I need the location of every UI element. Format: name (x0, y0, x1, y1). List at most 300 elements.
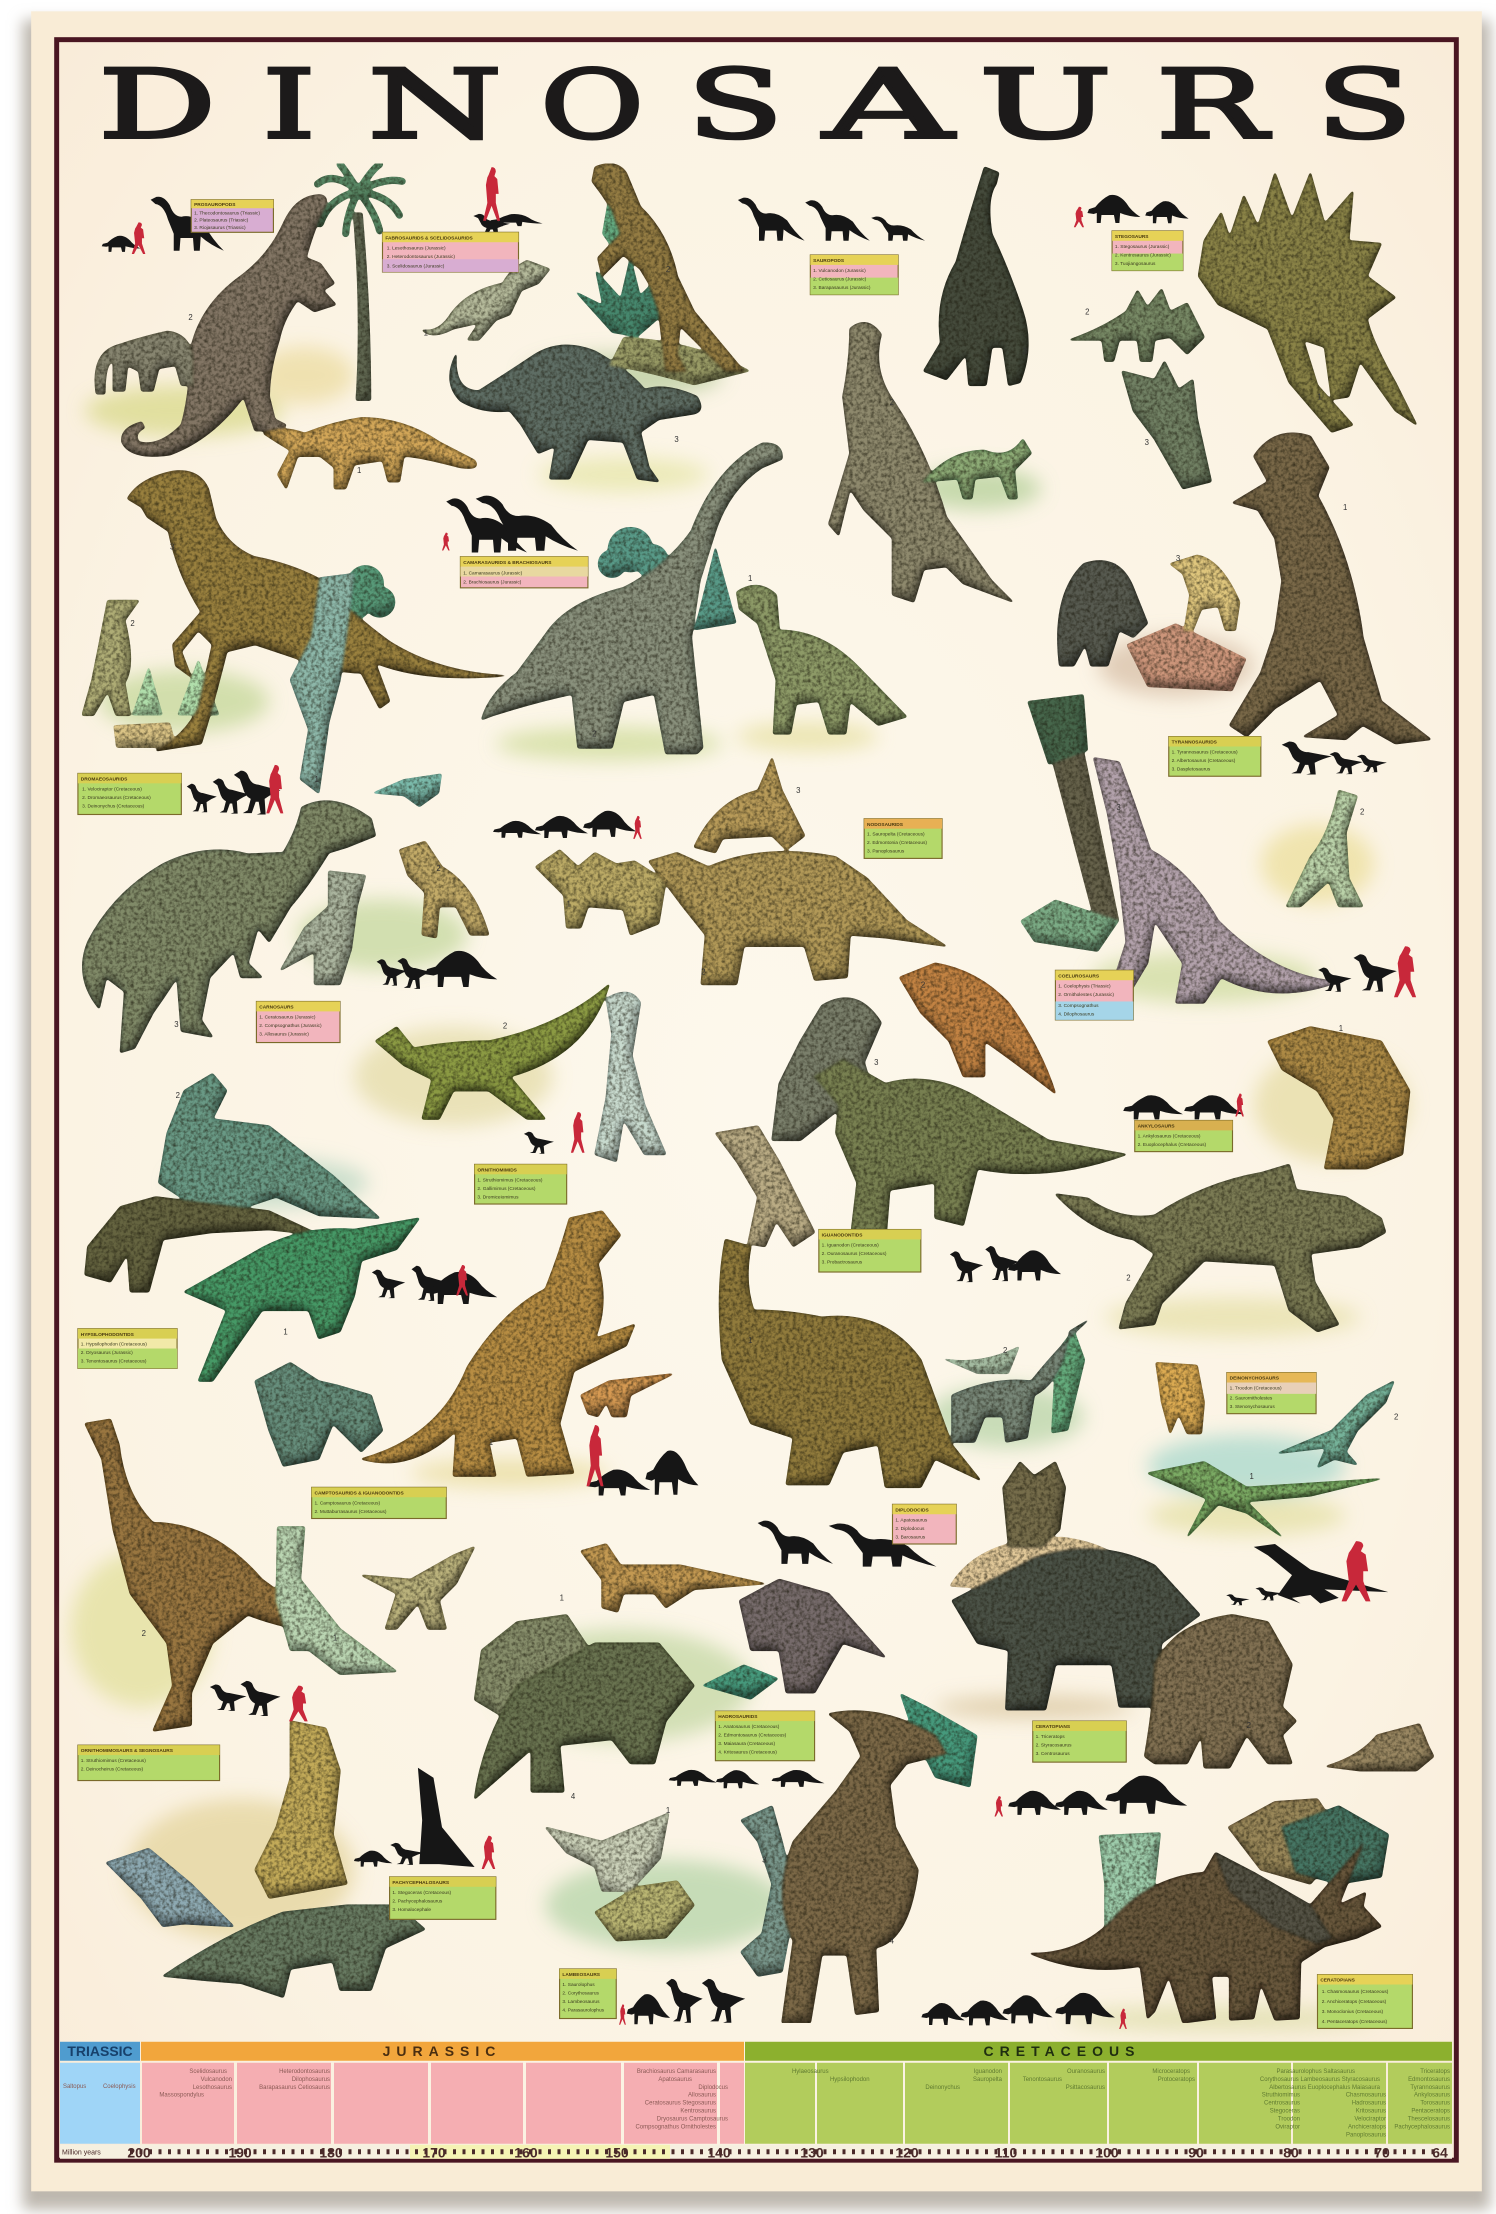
chart: Triassic cell: Coelophysis (103, 2084, 136, 2090)
figure numbers: 2 (436, 864, 441, 873)
caption: camarasaurs and brachiosaurs: 2. Brachiosaurus (Jurassic) (463, 580, 522, 586)
dinosaur paintings (82, 164, 1434, 2023)
dinosaur: parasaurolophus (782, 1711, 946, 2023)
dinosaur: tan theropod (715, 1126, 815, 1247)
caption: diplodocids: DIPLODOCIDS (895, 1507, 929, 1513)
chart: Jurassic genus names: Lesothosaurus (193, 2085, 232, 2091)
caption: ornithomimids (475, 1164, 567, 1204)
period header: Cretaceous (745, 2042, 1452, 2061)
caption: ornithomimosaurs (78, 1745, 220, 1781)
chart: Cretaceous genus names (792, 2069, 1450, 2139)
chart: Cretaceous genus names: Ouranosaurus (1067, 2069, 1105, 2075)
chart: Cretaceous genus names: Ankylosaurus (1414, 2093, 1450, 2099)
dinosaur: grey prosauropod (95, 331, 193, 394)
silhouettes: large ornithopods with human (586, 1425, 698, 1496)
dinosaur: pale green theropod (1286, 790, 1363, 907)
figure numbers (130, 265, 1398, 2021)
dinosaur: dark sauropod (924, 167, 1028, 385)
dinosaur: teal running theropod (1278, 1381, 1394, 1468)
caption: nodosaurs: 3. Panoplosaurus (867, 849, 905, 855)
figure numbers: 1 (748, 574, 752, 583)
caption: iguanodontids: 3. Probactrosaurus (822, 1260, 863, 1266)
figure numbers: 1 (560, 1594, 564, 1603)
caption: dromaeosaurs: 1. Velociraptor (Cretaceous) (82, 786, 142, 792)
figure numbers: 1 (489, 1438, 493, 1447)
dinosaur: grey-green pachy (475, 1615, 595, 1721)
caption: sauropods: 2. Cetiosaurus (Jurassic) (813, 276, 867, 282)
chart: Triassic cell: Saltopus (63, 2084, 86, 2090)
caption: tyrannosaurs: 3. Daspletosaurus (1172, 767, 1211, 773)
chart: Cretaceous genus names: Chasmosaurus (1346, 2093, 1386, 2099)
figure numbers: 1 (283, 1327, 288, 1336)
chart: million-years scale: 110 (995, 2145, 1017, 2161)
caption: ceratopsians lower: 2. Anchiceratops (Cretaceous) (1322, 1999, 1387, 2005)
dinosaur: green background ceratopsian (1099, 1833, 1160, 1929)
silhouettes: tyrannosaurs (1282, 742, 1387, 774)
chart: million-years scale: 130 (800, 2145, 824, 2161)
dinosaur: blue-green ornithopod (159, 1074, 380, 1218)
chart: Cretaceous genus names: Pentaceratops (1411, 2109, 1450, 2115)
caption: camptosaurs and iguanodonts: 2. Muttaburrasaurus (Cretaceous) (314, 1509, 387, 1515)
caption: carnosaurs: 2. Compsognathus (Jurassic) (259, 1023, 322, 1029)
caption: nodosaurs: 2. Edmontonia (Cretaceous) (867, 840, 927, 846)
dinosaur: golden prosauropod (264, 418, 476, 489)
silhouettes: early ornithischians (473, 167, 543, 236)
figure numbers: 2 (921, 980, 925, 989)
chart: Jurassic genus names: Barapasaurus Cetiosaurus (259, 2085, 330, 2091)
chart: Cretaceous cells (745, 2063, 1452, 2144)
dinosaur: distant sauropod (938, 1346, 1020, 1374)
figure numbers: 4 (571, 1792, 576, 1801)
caption: stegosaurs: 2. Kentrosaurus (Jurassic) (1115, 252, 1171, 258)
chart: Cretaceous genus names: Psittacosaurus (1066, 2085, 1105, 2091)
palm tree (317, 164, 402, 401)
dinosaur: big prosauropod (122, 195, 336, 456)
caption: camptosaurs and iguanodonts: 1. Camptosaurus (Cretaceous) (314, 1500, 380, 1506)
figure numbers: 2 (1247, 1721, 1251, 1730)
title: I (262, 50, 316, 160)
silhouettes: nodosaurs (493, 811, 642, 839)
chart: million-years scale: 190 (228, 2145, 252, 2161)
caption: hadrosaurs: 1. Anatosaurus (Cretaceous) (718, 1724, 780, 1730)
caption: hadrosaurs: 4. Kritosaurus (Cretaceous) (718, 1750, 777, 1756)
chart: Jurassic genus names: Apatosaurus (658, 2077, 692, 2083)
caption: ceratopsians upper (1033, 1721, 1126, 1762)
caption: stegosaurs: 3. Tuojiangosaurus (1115, 261, 1156, 267)
dinosaur: great triceratops (1030, 1844, 1381, 2023)
figure numbers: 3 (1116, 803, 1121, 812)
chart: Jurassic genus names: Dryosaurus Camptosaurus (657, 2117, 728, 2123)
figure numbers: 2 (142, 1629, 146, 1638)
dinosaur: blue ornithopod (106, 1849, 234, 1926)
chart: Triassic cell (60, 2063, 140, 2144)
caption: carnosaurs (256, 1001, 340, 1043)
chart: Cretaceous genus names: Microceratops (1152, 2069, 1190, 2075)
title: N (368, 50, 502, 160)
caption: coelurosaurs: 1. Coelophysis (Triassic) (1058, 983, 1111, 989)
caption: iguanodontids: 2. Ouranosaurus (Cretaceous) (822, 1251, 887, 1257)
black silhouettes with human scale (102, 167, 1416, 2029)
dinosaur: brown standing theropod (592, 164, 744, 371)
dinosaur: top ankylosaur (694, 758, 805, 853)
figure numbers: 2 (1112, 562, 1116, 571)
caption: ornithischians and scelidosaurs: FABROSAURIDS & SCELIDOSAURIDS (385, 235, 474, 241)
figure numbers: 3 (874, 1058, 878, 1067)
chart: Jurassic genus names: Ceratosaurus Stegosaurus (645, 2101, 716, 2107)
dinosaur: main armoured ankylosaur (649, 852, 946, 984)
caption: deinonychosaurs (1227, 1373, 1316, 1414)
dinosaur: tan theropod (400, 841, 489, 938)
caption: ceratopsians lower: CERATOPIANS (1320, 1978, 1356, 1984)
dinosaur: giant brachiosaur (482, 443, 782, 754)
silhouettes: ornithomimids (1318, 946, 1416, 997)
chart: Cretaceous genus names: Stegoceras (1270, 2109, 1300, 2115)
chart: million-years scale: 150 (605, 2145, 629, 2161)
tree: leaning trunk (1020, 694, 1119, 952)
caption: lambeosaurs: 2. Corythosaurus (562, 1990, 600, 1996)
caption: ornithischians and scelidosaurs: 2. Heterodontosaurus (Jurassic) (387, 254, 455, 260)
chart: Cretaceous genus names: Deinonychus (925, 2085, 960, 2091)
caption: stegosaurs: 1. Stegosaurus (Jurassic) (1115, 244, 1170, 250)
caption: lambeosaurs (560, 1969, 616, 2019)
silhouettes: stegosaurs (1074, 195, 1189, 227)
caption: nodosaurs (864, 819, 942, 858)
dinosaur: standing iguanodont (1230, 433, 1431, 744)
caption: stegosaurs (1112, 231, 1183, 271)
caption: ornithischians and scelidosaurs: 1. Lesothosaurus (Jurassic) (387, 245, 446, 251)
chart: Cretaceous genus names: Oviraptor (1275, 2125, 1300, 2131)
silhouettes: prosauropods (102, 197, 224, 254)
caption: pachycephalosaurs: 1. Stegoceras (Cretaceous) (392, 1890, 451, 1896)
period header: Triassic: TRIASSIC (67, 2043, 133, 2059)
silhouettes: ornithopods row (377, 951, 497, 989)
figure numbers: 3 (796, 786, 800, 795)
plant: cycad trees (598, 527, 737, 630)
chart: Cretaceous genus names: Anchiceratops (1348, 2125, 1386, 2131)
caption: deinonychosaurs: DEINONYCHOSAURS (1230, 1376, 1280, 1382)
dinosaur: styracosaur on mound (949, 1462, 1140, 1594)
caption: dromaeosaurs (78, 773, 181, 814)
caption: hypsilophodontids (78, 1329, 177, 1368)
figure numbers: 2 (890, 398, 894, 407)
caption: pachycephalosaurs: 2. Pachycephalosaurus (392, 1898, 443, 1904)
caption: pachycephalosaurs: PACHYCEPHALOSAURS (392, 1880, 450, 1886)
caption: lambeosaurs: LAMBEOSAURS (562, 1972, 601, 1978)
dinosaur: ostrich mimic (85, 1419, 340, 1731)
chart: Jurassic genus names: Diplodocus (698, 2085, 728, 2091)
caption: lambeosaurs: 1. Saurolophus (562, 1982, 595, 1988)
caption: hypsilophodontids: 3. Tenontosaurus (Cretaceous) (81, 1359, 147, 1365)
chart: Cretaceous genus names: Corythosaurus Lambeosaurus Styracosaurus (1260, 2077, 1380, 2083)
caption: tyrannosaurs: 2. Albertosaurus (Cretaceous) (1172, 758, 1236, 764)
silhouettes: ceratopsian row (921, 1993, 1127, 2029)
caption: hypsilophodontids: HYPSILOPHODONTIDS (81, 1332, 135, 1338)
caption: diplodocids: 2. Diplodocus (895, 1526, 925, 1532)
title: O (540, 50, 644, 160)
chart: Jurassic genus names: Kentrosaurus (680, 2109, 716, 2115)
chart: Cretaceous genus names: Edmontosaurus (1408, 2077, 1450, 2083)
dinosaur: spiky nodosaur (536, 850, 666, 935)
caption: ceratopsians lower: 4. Pentaceratops (Cretaceous) (1322, 2019, 1387, 2025)
title: U (979, 49, 1112, 160)
caption: ankylosaurs: 2. Euoplocephalus (Cretaceous) (1138, 1142, 1207, 1148)
dinosaur: small upright theropod (82, 601, 139, 715)
chart: Jurassic genus names: Allosaurus (688, 2093, 716, 2099)
chart: Cretaceous genus names: Thescelosaurus (1408, 2117, 1450, 2123)
caption: iguanodontids: IGUANODONTIDS (822, 1233, 863, 1239)
dinosaur: green-grey theropod (83, 801, 375, 1052)
chart: Cretaceous genus names: Triceratops (1420, 2069, 1450, 2075)
caption: ornithomimosaurs: 1. Struthiomimus (Cretaceous) (81, 1758, 146, 1764)
dinosaur: main tan ornithopod (361, 1211, 635, 1476)
caption: coelurosaurs: 4. Dilophosaurus (1058, 1012, 1095, 1018)
caption: prosauropods: 3. Riojasaurus (Triassic) (194, 225, 246, 231)
chart: Cretaceous genus names: Hypsilophodon (830, 2077, 870, 2083)
dinosaur: green stegosaur (1122, 361, 1211, 489)
chart: million-years scale (60, 2145, 1452, 2161)
dinosaur: slender teal lambeosaur (741, 1806, 796, 1976)
caption: coelurosaurs: COELUROSAURS (1058, 973, 1100, 979)
caption: deinonychosaurs: 3. Stenonychosaurus (1230, 1404, 1275, 1410)
dinosaur: pale teal theropod (290, 574, 354, 793)
chart: Cretaceous genus names: Velociraptor (1354, 2117, 1386, 2123)
caption: hadrosaurs: 2. Edmontosaurus (Cretaceous) (718, 1733, 787, 1739)
caption: sauropods: SAUROPODS (813, 258, 845, 264)
figure numbers: 3 (174, 1020, 179, 1029)
dinosaur: orange hadrosaur (900, 963, 1055, 1094)
figure numbers: 1 (1250, 1472, 1254, 1481)
chart: Cretaceous genus names: Hadrosaurus (1352, 2101, 1386, 2107)
period header: Triassic (60, 2042, 140, 2061)
title: A (823, 49, 955, 160)
figure numbers: 1 (1211, 2012, 1216, 2021)
dinosaur: big green hadrosaur (815, 1060, 1126, 1244)
caption: carnosaurs: 3. Allosaurus (Jurassic) (259, 1031, 309, 1037)
caption: ornithomimids: 3. Dromiceiomimus (477, 1194, 519, 1200)
dinosaurs: small green herd (924, 439, 1031, 499)
chart: Jurassic cells (142, 2063, 744, 2144)
caption: prosauropods: 1. Thecodontosaurus (Triassic) (194, 211, 260, 217)
caption: ceratopsians lower: 1. Chasmosaurus (Cretaceous) (1322, 1989, 1389, 1995)
figure numbers: 3 (170, 543, 174, 552)
caption: deinonychosaurs: 1. Troodon (Cretaceous) (1230, 1386, 1282, 1392)
caption: ceratopsians upper: 1. Triceratops (1036, 1734, 1065, 1740)
chart: Cretaceous genus names: Troodon (1278, 2117, 1300, 2123)
title: D (98, 50, 216, 160)
caption: camarasaurs and brachiosaurs: CAMARASAURIDS & BRACHIOSAURS (463, 560, 552, 566)
plants behind the large theropod (113, 565, 395, 748)
chart: million-years scale: 160 (514, 2145, 538, 2161)
chart: Jurassic genus names: Scelidosaurus (189, 2069, 227, 2075)
dinosaur: big armoured ankylosaur (1055, 1164, 1386, 1332)
chart: million-years scale: 90 (1188, 2145, 1204, 2161)
caption: ornithischians and scelidosaurs: 3. Scelidosaurus (Jurassic) (387, 264, 445, 270)
figure numbers: 3 (762, 1856, 766, 1865)
chart: Cretaceous genus names: Pachycephalosaurus (1394, 2125, 1450, 2131)
chart: Jurassic genus names: Brachiosaurus Camarasaurus (637, 2069, 716, 2075)
silhouettes: theropods (187, 765, 283, 814)
figure numbers: 1 (666, 1806, 670, 1815)
caption: coelurosaurs: 3. Compsognathus (1058, 1003, 1099, 1009)
caption: stegosaurs: STEGOSAURS (1115, 234, 1149, 240)
figure numbers: 1 (748, 1336, 752, 1345)
period header: Jurassic: JURASSIC (383, 2043, 501, 2059)
caption: ceratopsians upper: 3. Centrosaurus (1036, 1751, 1070, 1757)
caption: prosauropods (191, 200, 273, 232)
caption: ornithomimosaurs: ORNITHOMIMOSAURS & SEGNOSAURS (81, 1748, 174, 1754)
figure numbers: 1 (315, 775, 319, 784)
caption: carnosaurs: CARNOSAURS (259, 1005, 294, 1011)
figure numbers: 2 (1085, 307, 1089, 316)
dinosaur: large golden theropod (128, 471, 506, 751)
caption: sauropods (810, 255, 898, 295)
caption: dromaeosaurs: 3. Deinonychus (Cretaceous) (82, 803, 145, 809)
silhouettes: ornithopod with human (354, 1768, 495, 1869)
dinosaur: purple ornithomimid (1094, 758, 1339, 1003)
bird: teal pterosaur (371, 773, 442, 807)
dinosaur: green runner (375, 984, 609, 1119)
dinosaur: upright ankylosaur (1268, 1027, 1410, 1169)
caption: lambeosaurs: 4. Parasaurolophus (562, 2007, 605, 2013)
caption: sauropods: 3. Barapasaurus (Jurassic) (813, 285, 871, 291)
caption: prosauropods: 2. Plateosaurus (Triassic) (194, 218, 249, 224)
geological timeline (60, 2042, 1452, 2161)
silhouettes: lambeosaurs (619, 1979, 745, 2025)
caption: sauropods: 1. Vulcanodon (Jurassic) (813, 268, 866, 274)
caption: iguanodontids (819, 1230, 921, 1272)
dinosaur: teal psittacosaurs (255, 1363, 382, 1466)
figure numbers: 2 (188, 313, 193, 322)
caption: hypsilophodontids: 1. Hypsilophodon (Cretaceous) (81, 1342, 147, 1348)
figure numbers: 1 (424, 329, 428, 338)
dinosaur: pale hadrosaur (545, 1813, 669, 1891)
figure numbers: 1 (1343, 503, 1347, 512)
title: S (687, 50, 783, 160)
dinosaur: dark curved ornithopod (85, 1197, 320, 1292)
period header: Cretaceous: CRETACEOUS (984, 2043, 1140, 2059)
caption: ornithomimids: ORNITHOMIMIDS (477, 1167, 518, 1173)
dinosaur: bright green ornithopod (184, 1218, 419, 1381)
dinosaur: small orange ornithopod (581, 1374, 673, 1417)
dinosaur: small tan ceratopsian (1326, 1724, 1434, 1771)
chart: Jurassic genus names: Compsognathus Ornitholestes (635, 2125, 716, 2131)
figure numbers: 3 (1145, 438, 1149, 447)
chart: Cretaceous genus names: Parasaurolophus Saltasaurus (1276, 2069, 1355, 2075)
silhouettes: small group (524, 1112, 585, 1154)
caption: camptosaurs and iguanodonts: CAMPTOSAURIDS & IGUANODONTIDS (314, 1490, 404, 1496)
caption: deinonychosaurs: 2. Saurornitholestes (1230, 1396, 1273, 1402)
caption: ceratopsians upper: CERATOPIANS (1036, 1724, 1071, 1730)
chart: million-years scale: 180 (319, 2145, 343, 2161)
plant: teal leaves (701, 1664, 779, 1700)
caption: iguanodontids: 1. Iguanodon (Cretaceous) (822, 1243, 879, 1249)
caption: carnosaurs: 1. Ceratosaurus (Jurassic) (259, 1014, 316, 1020)
chart: Cretaceous genus names: Hylaeosaurus (792, 2069, 829, 2075)
figure numbers: 2 (592, 730, 596, 739)
caption: hadrosaurs (715, 1711, 815, 1761)
figure numbers: 2 (1394, 1412, 1398, 1421)
figure numbers: 2 (1003, 1346, 1007, 1355)
caption: ankylosaurs (1135, 1120, 1232, 1152)
caption: diplodocids: 1. Apatosaurus (895, 1517, 928, 1523)
dinosaur: brown ceratopsian (1145, 1615, 1296, 1768)
chart: million-years scale: 70 (1374, 2145, 1390, 2161)
plant: central ferns and log (574, 177, 751, 385)
dinosaur: great stegosaur (1198, 173, 1417, 432)
caption: ornithomimosaurs: 2. Deinocheirus (Cretaceous) (81, 1767, 144, 1773)
figure numbers: 1 (333, 1633, 337, 1642)
caption: diplodocids (892, 1504, 956, 1544)
dinosaur: tan dromaeosaur (1156, 1363, 1204, 1434)
dinosaur: small running mimic (361, 1547, 475, 1629)
chart: Cretaceous genus names: Struthiomimus (1262, 2093, 1300, 2099)
chart: million-years scale: 80 (1283, 2145, 1299, 2161)
scene: red-brown debris (1126, 623, 1247, 691)
caption: ornithischians and scelidosaurs (382, 232, 518, 272)
chart: Cretaceous genus names: Albertosaurus Euoplocephalus Maiasaura (1269, 2085, 1381, 2091)
silhouettes: camarasaurs (758, 1521, 936, 1567)
caption: nodosaurs: 1. Sauropelta (Cretaceous) (867, 832, 925, 838)
figure numbers: 2 (176, 1091, 180, 1100)
figure numbers: 2 (1360, 807, 1364, 816)
dinosaur: grey hadrosaur (772, 998, 881, 1140)
caption: lambeosaurs: 3. Lambeosaurus (562, 1999, 600, 2005)
figure numbers: 1 (1318, 392, 1322, 401)
figure numbers: 3 (1176, 554, 1180, 563)
chart: Cretaceous genus names: Sauropelta (973, 2077, 1003, 2083)
dinosaur: small stegosaur (1070, 289, 1204, 361)
figure numbers: 2 (1126, 1274, 1131, 1283)
figure numbers: 1 (618, 1019, 622, 1028)
silhouettes: brachiosaurs (442, 496, 578, 552)
dinosaur: yellow pachycephalosaur (255, 1721, 347, 1898)
silhouettes: mimics (210, 1681, 308, 1721)
chart: million-years scale: 100 (1095, 2145, 1119, 2161)
silhouettes: iguanodonts (372, 1265, 497, 1304)
title: S (1316, 50, 1412, 160)
caption: camarasaurs and brachiosaurs (460, 557, 588, 588)
chart: million-years scale: 64 (1432, 2145, 1448, 2161)
title (98, 49, 1412, 160)
dinosaur: spotted hadrosaur (595, 1881, 694, 1941)
dinosaur: background ceratopsians (1228, 1799, 1388, 1884)
dinosaur: dark triceratops (952, 1549, 1200, 1710)
chart: million-years scale: 200 (127, 2145, 151, 2161)
chart: Cretaceous genus names: Panoplosaurus (1346, 2133, 1386, 2139)
figure numbers: 2 (503, 1021, 507, 1030)
dinosaur: green-grey pachycephalosaur (163, 1905, 425, 1997)
chart: Jurassic genus names: Massospondylus (159, 2093, 204, 2099)
caption: pachycephalosaurs (390, 1877, 496, 1919)
chart: Jurassic genus names: Dilophosaurus (292, 2077, 330, 2083)
figure numbers: 2 (130, 619, 135, 628)
dinosaur: tan ornithopod (1170, 555, 1240, 630)
caption: hadrosaurs: HADROSAURIDS (718, 1714, 758, 1720)
figure numbers: 1 (1339, 1024, 1343, 1033)
chart: Cretaceous genus names: Centrosaurus (1264, 2101, 1300, 2107)
caption: prosauropods: PROSAUROPODS (194, 202, 236, 208)
period header: Jurassic (141, 2042, 744, 2061)
figure numbers: 1 (567, 900, 571, 909)
figure numbers: 2 (666, 265, 670, 274)
title: R (1156, 50, 1271, 160)
chart: Jurassic genus names: Vulcanodon (201, 2077, 232, 2083)
chart: Cretaceous genus names: Tyrannosaurus (1410, 2085, 1450, 2091)
chart: Cretaceous genus names: Kritosaurus (1356, 2109, 1386, 2115)
chart: million-years scale: Million years (62, 2150, 101, 2157)
caption: pachycephalosaurs: 3. Homalocephale (392, 1907, 431, 1913)
dinosaur: big dark ornithopod (475, 1643, 694, 1799)
